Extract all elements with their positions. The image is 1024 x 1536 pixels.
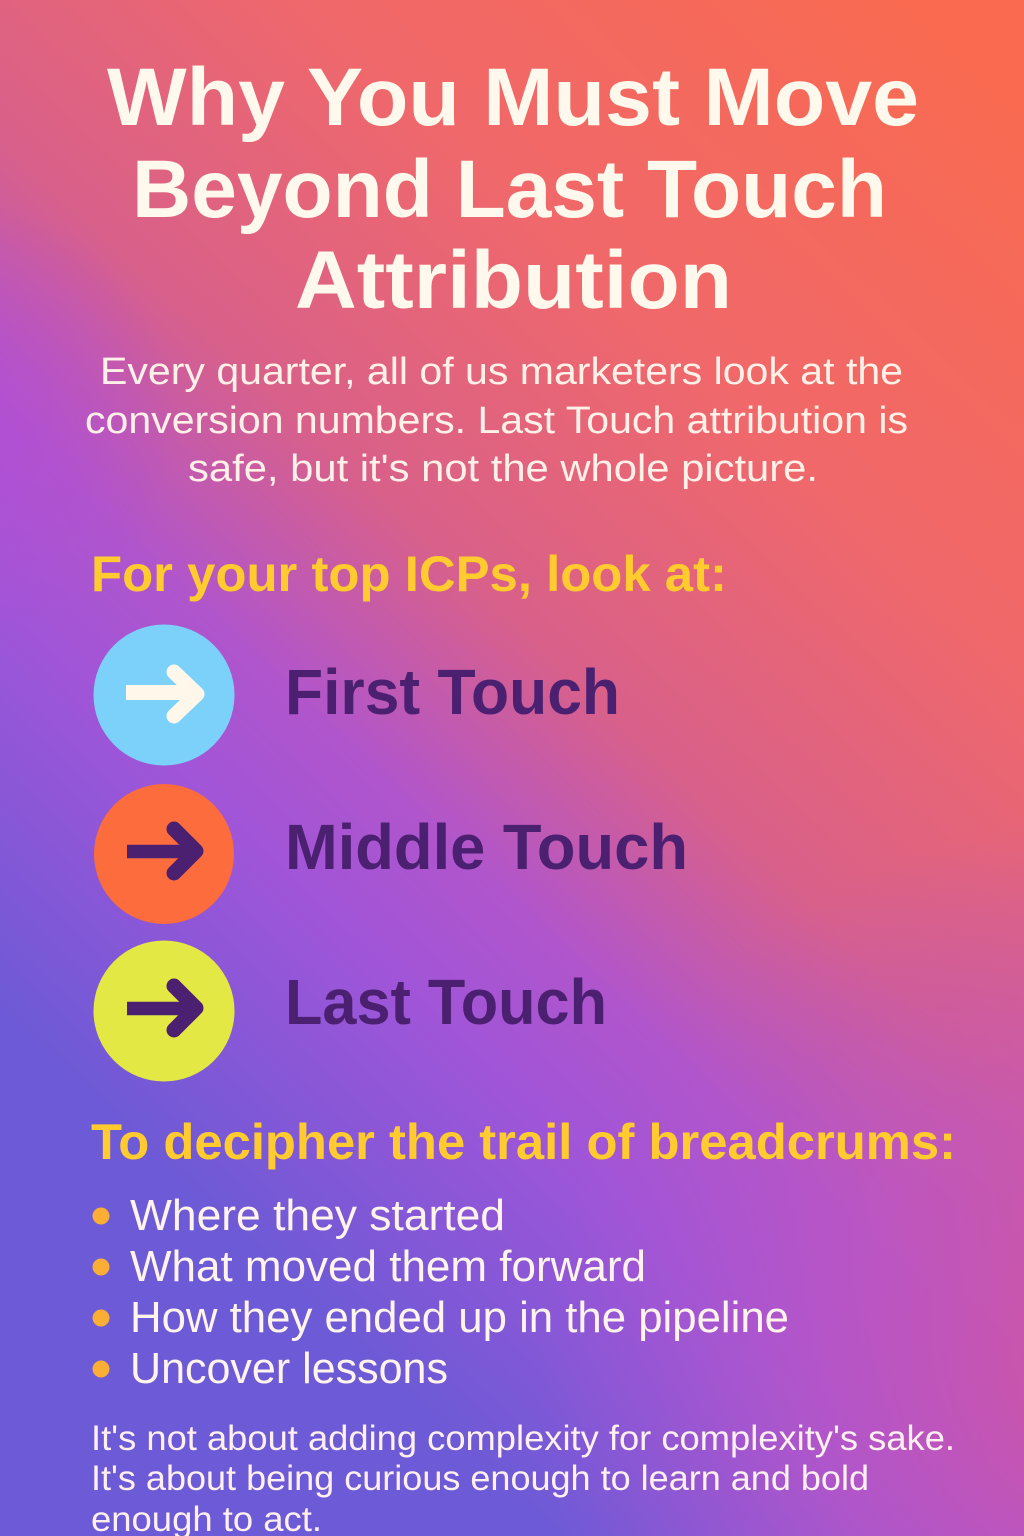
title: Attribution xyxy=(295,235,732,326)
intro text: safe, but it's not the whole picture. xyxy=(188,448,818,490)
bullet: pipeline: How they ended up in the pipeline xyxy=(130,1293,789,1342)
icon: blue circle with arrow xyxy=(94,624,234,766)
label: Middle Touch xyxy=(285,811,688,883)
bullet: where they started: Where they started xyxy=(130,1191,505,1240)
title: Beyond Last Touch xyxy=(132,144,887,235)
intro text: Every quarter, all of us marketers look at the xyxy=(100,351,903,393)
title: Why You Must Move xyxy=(107,52,919,143)
closing text: It's about being curious enough to learn and bold xyxy=(91,1459,869,1498)
label: Last Touch xyxy=(285,966,607,1038)
icon: yellow circle with arrow xyxy=(94,940,234,1082)
heading: breadcrumbs: To decipher the trail of breadcrums: xyxy=(91,1114,956,1170)
bullet list xyxy=(92,1191,789,1393)
intro text: conversion numbers. Last Touch attribution is xyxy=(85,400,908,442)
item: First Touch xyxy=(94,624,620,766)
closing text: It's not about adding complexity for complexity's sake. xyxy=(91,1419,955,1458)
bullet: what moved them forward: What moved them forward xyxy=(130,1242,646,1291)
closing text xyxy=(91,1419,955,1536)
icon: orange circle with arrow xyxy=(94,784,234,924)
label: First Touch xyxy=(285,656,620,728)
intro text xyxy=(85,351,908,490)
item: Last Touch xyxy=(94,940,607,1082)
title xyxy=(107,52,919,326)
heading: top ICPs: For your top ICPs, look at: xyxy=(91,546,727,602)
bullet: uncover lessons: Uncover lessons xyxy=(130,1344,448,1393)
item: Middle Touch xyxy=(94,784,688,924)
